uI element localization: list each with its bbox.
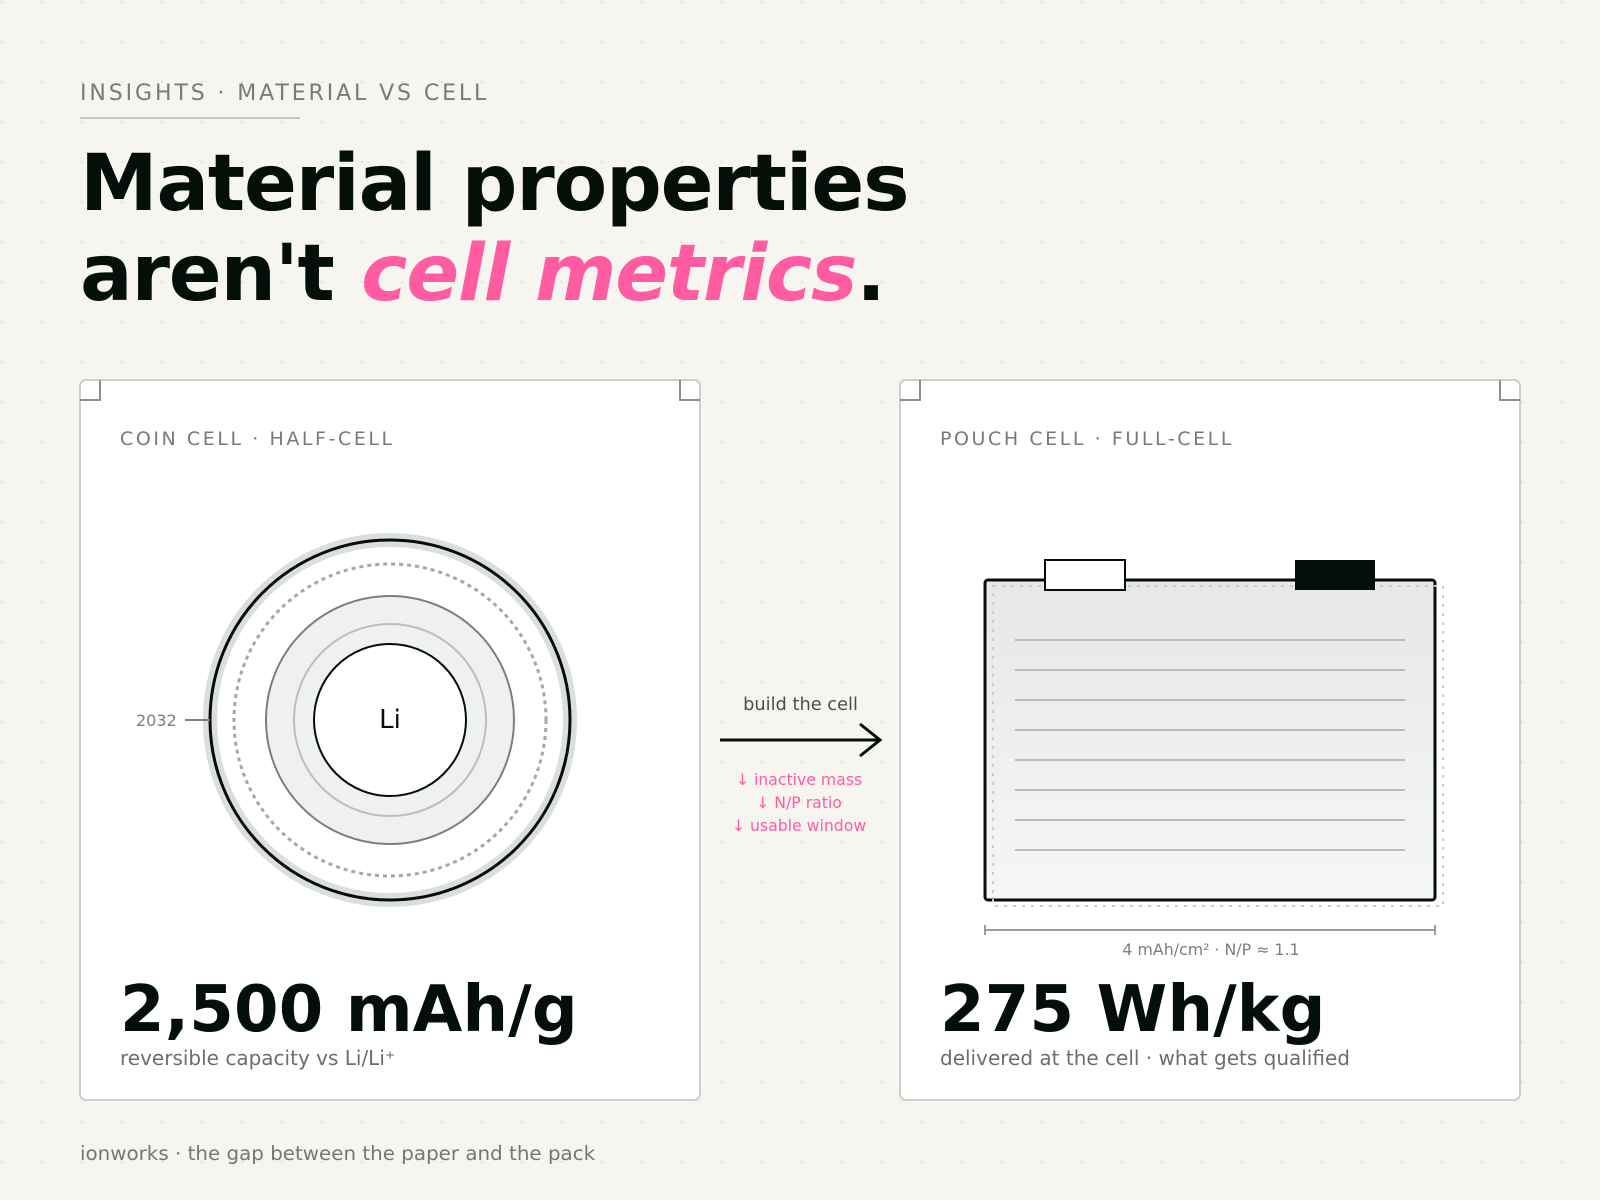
title: aren't cell metrics. [80,229,885,319]
panel: pouch cell [900,380,1520,1100]
panel: coin cell [80,380,700,1100]
pouch panel label: POUCH CELL · FULL-CELL [940,428,1234,450]
arrow: build the cell [720,694,880,835]
penalties list: ↓ usable window [732,816,866,835]
coin cell diagram [210,540,570,900]
coin size callout: 2032 [136,711,177,730]
coin metric: 2,500 mAh/g [120,973,578,1047]
title: Material properties [80,139,908,229]
penalties list: ↓ N/P ratio [756,793,842,812]
arrow: build the cell: build the cell [743,694,858,715]
coin cell diagram: Li [379,705,401,735]
penalties list: ↓ inactive mass [736,770,862,789]
coin metric caption: reversible capacity vs Li/Li⁺ [120,1046,395,1070]
pouch dimension line: 4 mAh/cm² · N/P ≈ 1.1 [1122,940,1300,959]
pouch dimension line [985,925,1435,959]
eyebrow label: INSIGHTS · MATERIAL VS CELL [80,81,489,106]
coin panel label: COIN CELL · HALF-CELL [120,428,395,450]
pouch cell diagram [985,560,1443,906]
pouch metric: 275 Wh/kg [940,973,1326,1047]
footer: ionworks · the gap between the paper and the pack [80,1142,596,1165]
coin size callout [136,711,210,730]
pouch metric caption: delivered at the cell · what gets qualified [940,1046,1350,1070]
